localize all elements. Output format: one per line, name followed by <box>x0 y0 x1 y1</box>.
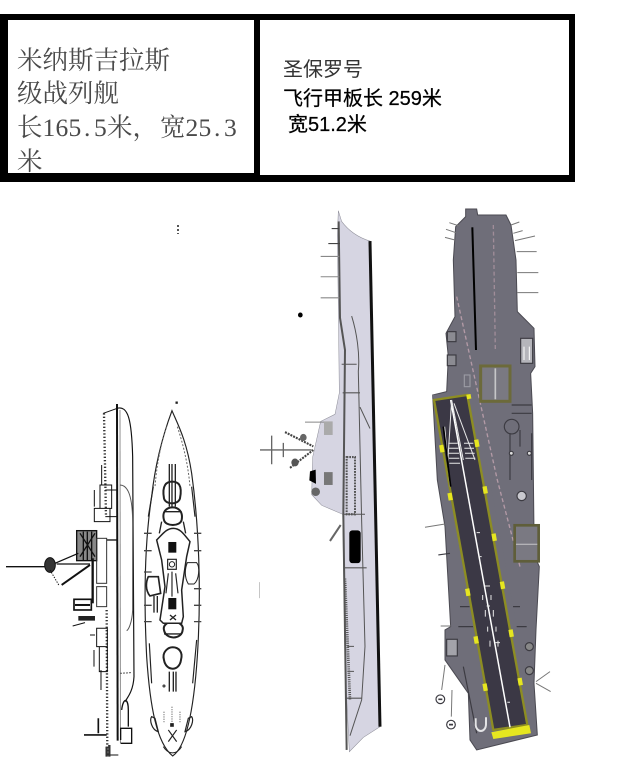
angled flight deck <box>433 390 535 739</box>
forward elevator <box>481 366 510 401</box>
carrier side view <box>259 211 380 752</box>
stray mark above battleship <box>177 225 179 234</box>
panel: carrier specifications <box>260 20 569 175</box>
stray marks <box>259 312 303 598</box>
panel: carrier specifications: 圣保罗号 <box>283 58 363 81</box>
turret group <box>146 482 199 669</box>
panel: battleship specifications: 长165.5米，宽25.3 <box>17 113 237 142</box>
header frame <box>0 14 575 182</box>
battleship side view <box>6 404 134 757</box>
battleship plan view <box>144 402 201 756</box>
carrier plan view <box>425 209 551 750</box>
island details <box>291 421 333 496</box>
hangar opening <box>349 530 361 563</box>
panel: battleship specifications: 级战列舰 <box>17 79 119 108</box>
stern U marking <box>476 717 486 731</box>
flight deck edge <box>370 241 380 727</box>
antennas <box>425 222 551 717</box>
midship superstructure <box>157 522 190 623</box>
hull profile <box>312 211 380 752</box>
deck centre line <box>451 400 510 727</box>
panel: carrier specifications: 宽51.2米 <box>288 113 367 136</box>
island and gun details <box>436 332 533 733</box>
catapult markings <box>445 400 510 702</box>
pink dashed runway lines <box>457 225 520 567</box>
panel: battleship specifications: 米纳斯吉拉斯 <box>17 46 170 75</box>
hull and main deck <box>433 209 539 750</box>
panel: battleship specifications: 米 <box>17 147 43 176</box>
panel: carrier specifications: 飞行甲板长 259米 <box>283 87 442 110</box>
panel: battleship specifications <box>8 20 254 176</box>
yellow deck markers <box>439 394 531 739</box>
aft elevator <box>515 525 539 561</box>
straight deck centre line <box>472 227 476 350</box>
